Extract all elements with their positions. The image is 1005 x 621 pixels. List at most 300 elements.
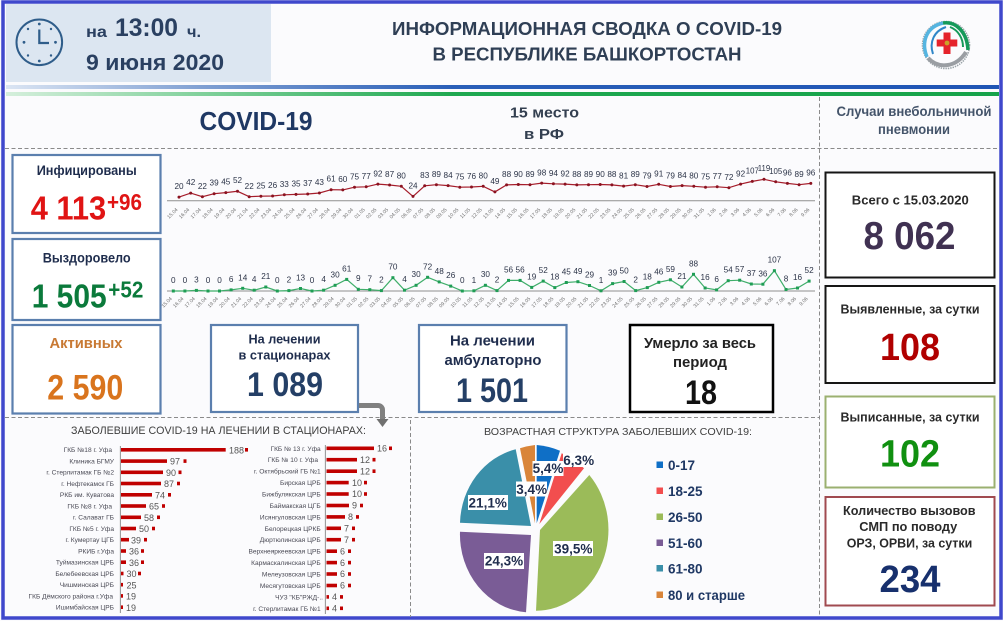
- line chart: infected per day: 61: [327, 174, 336, 184]
- line chart: infected per day: 06.05: [400, 207, 414, 220]
- line chart: infected per day: 89: [584, 170, 593, 179]
- line chart: infected per day: 30.05: [681, 207, 694, 220]
- line chart: infected per day: 4.06: [742, 207, 753, 218]
- line chart: recovered per day: 52: [539, 266, 548, 275]
- line chart: recovered per day: 61: [342, 264, 352, 274]
- bar chart: hospitals right column: 10: [352, 478, 362, 488]
- line chart: recovered per day: 21.04: [230, 296, 243, 309]
- line chart: infected per day: 30.04: [342, 207, 355, 220]
- line chart: infected per day: 22.05: [588, 207, 601, 220]
- line chart: recovered per day: 18.05: [542, 296, 555, 309]
- bar chart: hospitals right column: 16: [377, 444, 387, 454]
- line chart: infected per day: 20.04: [225, 207, 238, 220]
- line chart: infected per day: 11.05: [459, 207, 472, 220]
- line chart: infected per day: 16.05: [517, 207, 531, 220]
- legend: age groups: 61-80: [668, 562, 703, 577]
- line chart: recovered per day: 50: [620, 266, 629, 276]
- line chart: recovered per day: 11.05: [461, 296, 474, 309]
- heading: rank in Russia: [510, 104, 579, 143]
- time: 13:00: [115, 14, 178, 42]
- bar chart: hospitals left column: 30: [126, 569, 137, 579]
- bar chart: hospitals right column: Бижбулякская ЦРБ: [262, 490, 321, 498]
- line chart: infected per day: 77: [362, 172, 371, 181]
- line chart: recovered per day: 0: [217, 276, 222, 285]
- line chart: infected per day: 21.04: [237, 207, 250, 220]
- line chart: infected per day: 27.04: [307, 207, 320, 220]
- bar chart: hospitals right column: 6: [340, 558, 345, 568]
- bar chart: hospitals left column: 90: [166, 468, 176, 478]
- line chart: recovered per day: 29.05: [669, 296, 682, 309]
- bar chart: hospitals left column: 74: [155, 490, 165, 500]
- line chart: infected per day: 03.05: [377, 207, 390, 220]
- time: [86, 14, 201, 42]
- panel: ambulance calls: Количество вызовов: [843, 503, 976, 518]
- line chart: infected per day: 15.05: [506, 207, 519, 220]
- bar chart: hospitals left column: [29, 446, 248, 613]
- line chart: recovered per day: 4.06: [741, 296, 752, 307]
- line chart: infected per day: 83: [420, 171, 430, 180]
- line chart: infected per day: [166, 164, 816, 220]
- line chart: recovered per day: 8: [784, 274, 789, 284]
- line chart: recovered per day: 08.05: [427, 296, 440, 309]
- line chart: infected per day: 15.04: [166, 207, 180, 220]
- line chart: recovered per day: 46: [654, 268, 664, 276]
- pie chart: age structure: 3,4%: [516, 482, 547, 497]
- heading: rank in Russia: в РФ: [524, 126, 564, 143]
- line chart: recovered per day: 59: [666, 265, 675, 274]
- line chart: recovered per day: 2: [379, 276, 384, 284]
- line chart: infected per day: 23.05: [599, 207, 612, 220]
- line chart: infected per day: 24.04: [272, 207, 285, 220]
- panel: infected: +96: [107, 189, 142, 215]
- line chart: infected per day: 16.04: [178, 207, 191, 220]
- bar chart: hospitals right column: Бирская ЦРБ: [280, 480, 321, 487]
- panel: pneumonia discharged per day: [826, 396, 994, 488]
- header divider lines: [6, 85, 999, 96]
- line chart: recovered per day: 06.05: [403, 296, 417, 309]
- panel: recovered: 1 505: [32, 278, 107, 315]
- line chart: recovered per day: 13: [296, 274, 305, 282]
- bar chart: hospitals right column: 9: [352, 501, 357, 511]
- line chart: infected per day: 76: [467, 172, 476, 181]
- heading: pneumonia: пневмонии: [878, 122, 950, 137]
- line chart: recovered per day: 4: [402, 275, 407, 284]
- line chart: infected per day: 80: [397, 172, 406, 180]
- bar chart: hospitals right column: Исянгуловская ЦРБ: [260, 514, 321, 521]
- line chart: infected per day: 29.05: [669, 207, 683, 220]
- line chart: infected per day: 72: [724, 173, 734, 182]
- line chart: infected per day: 88: [502, 170, 512, 179]
- line chart: infected per day: 79: [666, 172, 675, 180]
- icon: health ministry logo: [922, 22, 970, 68]
- line chart: infected per day: 90: [514, 170, 523, 179]
- line chart: recovered per day: 72: [423, 262, 433, 272]
- line chart: infected per day: 17.05: [529, 207, 542, 220]
- line chart: recovered per day: 107: [768, 256, 782, 264]
- bar chart: hospitals right column: 4: [332, 592, 337, 602]
- panel: in hospitals: в стационарах: [238, 347, 331, 362]
- line chart: recovered per day: 15.05: [507, 296, 521, 309]
- line chart: infected per day: 92: [561, 170, 570, 178]
- panel: pneumonia total: Всего с 15.03.2020: [852, 192, 969, 207]
- bar chart: hospitals right column: Мелеузовская ЦРБ: [262, 572, 321, 578]
- line chart: infected per day: 25.05: [623, 207, 636, 220]
- line chart: recovered per day: 15.04: [161, 296, 174, 309]
- line chart: recovered per day: 30: [331, 270, 340, 280]
- line chart: recovered per day: 88: [689, 260, 698, 268]
- line chart: infected per day: 22.04: [248, 207, 261, 220]
- line chart: recovered per day: 3.06: [729, 296, 740, 307]
- line chart: infected per day: 24.05: [611, 207, 624, 220]
- line chart: infected per day: 43: [315, 178, 324, 187]
- line chart: recovered per day: 36: [758, 270, 768, 278]
- line chart: recovered per day: 1.06: [706, 296, 717, 307]
- panel: deaths: период: [673, 354, 727, 371]
- line chart: recovered per day: 21: [677, 272, 687, 281]
- line chart: recovered per day: 07.05: [415, 296, 428, 309]
- legend: age groups: 26-50: [668, 510, 703, 525]
- line chart: infected per day: 75: [350, 172, 359, 182]
- line chart: recovered per day: 23.04: [253, 296, 266, 309]
- line chart: recovered per day: 9.06: [798, 296, 810, 307]
- bar chart: hospitals left column: 58: [144, 513, 154, 523]
- line chart: recovered per day: 18.04: [195, 296, 209, 309]
- panel: active: Активных: [50, 335, 123, 352]
- line chart: recovered per day: 6: [714, 275, 719, 284]
- panel: pneumonia total: 8 062: [864, 215, 956, 258]
- line chart: infected per day: 52: [233, 176, 242, 185]
- line chart: infected per day: 25.04: [283, 207, 297, 220]
- panel: deaths: [630, 325, 773, 412]
- time: на: [86, 24, 107, 41]
- bar chart: hospitals right column: 6: [340, 569, 345, 579]
- arrow: from hospitals panel to hospital chart: [359, 406, 388, 427]
- line chart: infected per day: 77: [713, 172, 722, 181]
- line chart: recovered per day: 18: [643, 272, 652, 282]
- line chart: recovered per day: 29.04: [322, 296, 336, 309]
- line chart: recovered per day: 1: [599, 276, 604, 285]
- bar chart: hospitals right column: 6: [340, 546, 345, 556]
- line chart: infected per day: 8.06: [788, 207, 800, 218]
- bar chart: hospitals right column: Верхнеяркеевская ЦРБ: [248, 549, 321, 556]
- bar chart: hospitals left column: 97: [170, 457, 180, 467]
- line chart: recovered per day: 0: [275, 276, 280, 285]
- line chart: recovered per day: 30.05: [681, 296, 694, 309]
- panel: pneumonia detected per day: Выявленные, за сутки: [840, 301, 980, 316]
- panel: recovered: +52: [108, 276, 143, 302]
- line chart: recovered per day: 56: [516, 266, 525, 274]
- panel: outpatient: амбулаторно: [444, 352, 542, 369]
- bar chart: hospitals right column: 8: [348, 512, 353, 522]
- bar chart: hospitals left column: 19: [126, 603, 136, 613]
- legend: age groups: 80 и старше: [668, 588, 745, 603]
- line chart: recovered per day: 19.04: [207, 296, 220, 309]
- bar chart: hospitals left column: 188: [229, 446, 244, 456]
- panel: outpatient: [419, 325, 566, 412]
- line chart: infected per day: 6.06: [765, 207, 776, 218]
- bar chart: hospitals left column: 19: [126, 592, 136, 602]
- line chart: recovered per day: 56: [504, 266, 513, 274]
- line chart: infected per day: 39: [210, 178, 219, 188]
- bar chart: hospitals right column: Месягутовская ЦРБ: [260, 583, 321, 590]
- line chart: recovered per day: 52: [805, 266, 814, 275]
- line chart: infected per day: 96: [783, 168, 792, 178]
- date: 9 июня 2020: [86, 50, 224, 75]
- panel: infected: [12, 155, 160, 233]
- panel: infected: Инфицированы: [37, 162, 137, 178]
- bar chart: hospitals left column: 36: [129, 558, 139, 568]
- panel: outpatient: 1 501: [456, 372, 528, 410]
- line chart: recovered per day: 22.05: [588, 296, 602, 309]
- line chart: recovered per day: 23.05: [600, 296, 613, 309]
- line chart: infected per day: 80: [689, 172, 699, 180]
- line chart: recovered per day: 17.04: [184, 296, 197, 309]
- line chart: recovered per day: 5.06: [752, 296, 763, 307]
- pie chart: age structure: [460, 445, 608, 612]
- line chart: infected per day: 94: [549, 169, 558, 178]
- bar chart: hospitals right column: Белорецкая ЦРКБ: [265, 526, 321, 533]
- line chart: recovered per day: 04.05: [380, 296, 393, 309]
- line chart: infected per day: 5.06: [753, 207, 765, 218]
- main title: [392, 19, 782, 64]
- line chart: recovered per day: 45: [562, 268, 571, 276]
- line chart: recovered per day: 70: [388, 262, 398, 272]
- line chart: infected per day: 84: [678, 171, 687, 180]
- line chart: recovered per day: 1: [472, 276, 477, 285]
- line chart: infected per day: 87: [385, 170, 395, 179]
- main title: ИНФОРМАЦИОННАЯ СВОДКА О COVID-19: [392, 19, 782, 39]
- line chart: recovered per day: 0: [310, 276, 315, 285]
- bar chart: hospitals left column: Клиника БГМУ: [69, 458, 115, 465]
- line chart: infected per day: 26.04: [295, 207, 308, 220]
- bar chart: hospitals right column: Баймакская ЦГБ: [270, 502, 321, 510]
- line chart: infected per day: 60: [338, 175, 348, 184]
- line chart: infected per day: 26.05: [634, 207, 648, 220]
- bar chart: hospitals left column: г. Стерлитамак ГБ №2: [46, 470, 114, 477]
- line chart: recovered per day: 26: [446, 271, 456, 280]
- panel: ambulance calls: [826, 497, 994, 606]
- line chart: recovered per day: 03.05: [369, 296, 382, 309]
- panel: recovered: Выздоровело: [43, 250, 131, 266]
- line chart: recovered per day: 31.05: [692, 296, 706, 309]
- line chart: recovered per day: 2: [287, 276, 292, 284]
- bar chart: hospitals right column: Дюртюлинская ЦРБ: [260, 537, 321, 544]
- line chart: recovered per day: 20.04: [218, 296, 232, 309]
- line chart: recovered per day: 8.06: [787, 296, 798, 307]
- line chart: infected per day: 75: [701, 172, 710, 182]
- legend: age groups: 0-17: [668, 458, 695, 473]
- line chart: recovered per day: 17.05: [531, 296, 544, 309]
- line chart: infected per day: 35: [291, 180, 301, 188]
- line chart: infected per day: 92: [736, 170, 746, 178]
- heading: COVID-19: COVID-19: [200, 106, 312, 136]
- date and time panel: [6, 4, 271, 82]
- line chart: infected per day: 28.04: [318, 207, 332, 220]
- line chart: recovered per day: 27.05: [646, 296, 659, 309]
- pie chart: age structure: 39,5%: [554, 541, 592, 556]
- bar chart: hospitals right column: 12: [360, 466, 370, 476]
- line chart: recovered per day: 25.05: [623, 296, 636, 309]
- line chart: recovered per day: 16.05: [519, 296, 532, 309]
- line chart: infected per day: 27.05: [646, 207, 659, 220]
- line chart: recovered per day: 37: [747, 269, 756, 278]
- bar chart: hospitals left column: ГКБ №5 г. Уфа: [69, 526, 114, 533]
- line chart: infected per day: 20.05: [564, 207, 577, 220]
- line chart: recovered per day: 09.05: [438, 296, 451, 309]
- line chart: infected per day: 33: [280, 180, 289, 189]
- line chart: recovered per day: 21.05: [577, 296, 590, 309]
- line chart: infected per day: 2.06: [718, 207, 729, 218]
- panel: infected: 4 113: [31, 190, 106, 227]
- bar chart: hospitals left column: ГКБ №8 г. Уфа: [67, 503, 112, 510]
- line chart: recovered per day: 48: [435, 267, 444, 276]
- pie chart: age structure: 5,4%: [533, 461, 563, 476]
- bar chart: hospitals left column: 50: [139, 524, 149, 534]
- heading: age structure: ВОЗРАСТНАЯ СТРУКТУРА ЗАБОЛЕВШИХ COVID-19:: [484, 426, 752, 438]
- line chart: infected per day: 09.05: [435, 207, 449, 220]
- line chart: infected per day: 02.05: [365, 207, 378, 220]
- line chart: infected per day: 13.05: [482, 207, 495, 220]
- bar chart: hospitals left column: Ишимбайская ЦРБ: [56, 604, 114, 612]
- line chart: recovered per day: 20.05: [565, 296, 578, 309]
- line chart: infected per day: 19.04: [213, 207, 226, 220]
- panel: pneumonia discharged per day: Выписанные, за сутки: [840, 410, 980, 425]
- line chart: infected per day: 79: [642, 172, 652, 180]
- line chart: infected per day: 10.05: [447, 207, 460, 220]
- line chart: infected per day: 01.05: [354, 207, 367, 220]
- legend: age groups: [656, 458, 745, 603]
- line chart: recovered per day: 30: [481, 270, 490, 279]
- line chart: infected per day: 107: [746, 166, 759, 176]
- panel: outpatient: На лечении: [450, 332, 535, 350]
- line chart: recovered per day: 4: [321, 275, 326, 284]
- line chart: infected per day: 07.05: [412, 207, 425, 220]
- heading: pneumonia: Случаи внебольничной: [836, 104, 992, 119]
- line chart: infected per day: 89: [525, 170, 535, 179]
- legend: age groups: 51-60: [668, 536, 703, 551]
- bar chart: hospitals left column: РКИБ г.Уфа: [78, 548, 114, 555]
- panel: active: [12, 325, 160, 414]
- line chart: recovered per day: 22.04: [242, 296, 255, 309]
- line chart: recovered per day: 14.05: [496, 296, 509, 309]
- line chart: recovered per day: 0: [171, 276, 176, 285]
- line chart: recovered per day: 30: [412, 270, 421, 279]
- line chart: recovered per day: 01.05: [346, 296, 359, 309]
- line chart: infected per day: 29.04: [330, 207, 343, 220]
- bar chart: hospitals left column: ГКБ Дёмского района г.Уфа: [29, 592, 113, 600]
- line chart: recovered per day: 29: [585, 270, 594, 280]
- panel: deaths: Умерло за весь: [644, 335, 756, 352]
- line chart: recovered per day: 2: [495, 276, 500, 284]
- line chart: recovered per day: 18: [550, 272, 560, 282]
- line chart: infected per day: 22: [245, 182, 254, 191]
- line chart: recovered per day: 4: [252, 275, 257, 284]
- line chart: infected per day: 75: [455, 172, 465, 182]
- pie chart: age structure: 6,3%: [563, 453, 594, 468]
- line chart: recovered per day: 2.06: [717, 296, 729, 307]
- line chart: infected per day: 31.05: [693, 207, 706, 220]
- line chart: infected per day: 7.06: [777, 207, 788, 218]
- line chart: recovered per day: 16: [793, 273, 802, 282]
- line chart: infected per day: 21.05: [576, 207, 589, 220]
- bar chart: hospitals left column: г. Нефтекамск ГБ: [61, 481, 114, 488]
- bar chart: hospitals left column: Туймазинская ЦРБ: [56, 559, 114, 567]
- line chart: infected per day: 96: [806, 168, 816, 178]
- panel: pneumonia discharged per day: 102: [880, 434, 940, 476]
- line chart: recovered per day: [161, 256, 815, 309]
- bar chart: hospitals right column: г. Октябрьский ГБ №1: [254, 468, 321, 476]
- line chart: recovered per day: 14: [238, 274, 248, 282]
- bar chart: hospitals right column: 6: [340, 581, 345, 591]
- line chart: infected per day: 28.05: [658, 207, 671, 220]
- line chart: recovered per day: 16.04: [172, 296, 185, 309]
- panel: ambulance calls: СМП по поводу: [859, 519, 958, 534]
- bar chart: hospitals left column: РКБ им. Куватова: [60, 492, 114, 499]
- line chart: infected per day: 42: [186, 178, 196, 187]
- line chart: recovered per day: 49: [573, 267, 583, 276]
- line chart: recovered per day: 28.05: [658, 296, 671, 309]
- bar chart: hospitals left column: г. Салават ГБ: [73, 515, 114, 522]
- heading: pneumonia: [836, 104, 992, 137]
- line chart: infected per day: 14.05: [494, 207, 507, 220]
- pie chart: age structure: 21,1%: [469, 495, 507, 510]
- line chart: infected per day: 89: [432, 170, 441, 179]
- line chart: recovered per day: 05.05: [392, 296, 405, 309]
- line chart: infected per day: 17.04: [190, 207, 203, 220]
- line chart: recovered per day: 13.05: [484, 296, 498, 309]
- panel: in hospitals: 1 089: [247, 366, 323, 404]
- line chart: recovered per day: 0: [183, 276, 188, 285]
- bar chart: hospitals left column: ГКБ №18 г. Уфа: [64, 447, 112, 454]
- bar chart: hospitals left column: 65: [149, 502, 159, 512]
- line chart: recovered per day: 39: [608, 268, 618, 278]
- panel: pneumonia total: [826, 172, 994, 278]
- line chart: infected per day: 12.05: [471, 207, 484, 220]
- line chart: recovered per day: 28.04: [311, 296, 324, 309]
- line chart: recovered per day: 54: [724, 266, 733, 274]
- line chart: infected per day: 25: [256, 182, 266, 190]
- bar chart: hospitals right column: 7: [344, 535, 349, 545]
- line chart: infected per day: 04.05: [389, 207, 402, 220]
- line chart: infected per day: 23.04: [260, 207, 273, 220]
- line chart: infected per day: 89: [631, 170, 640, 179]
- line chart: recovered per day: 24.05: [611, 296, 625, 309]
- line chart: recovered per day: 6.06: [764, 296, 775, 307]
- line chart: recovered per day: 27.04: [299, 296, 313, 309]
- line chart: recovered per day: 3: [194, 276, 199, 284]
- line chart: infected per day: 119: [758, 164, 770, 173]
- panel: ambulance calls: 234: [880, 559, 940, 601]
- line chart: recovered per day: 2: [633, 276, 638, 284]
- line chart: recovered per day: 19: [527, 272, 537, 282]
- panel: pneumonia detected per day: [826, 286, 994, 383]
- line chart: recovered per day: 30.04: [334, 296, 347, 309]
- bar chart: hospitals left column: Белебеевская ЦРБ: [55, 570, 114, 578]
- line chart: recovered per day: 25.04: [276, 296, 289, 309]
- line chart: recovered per day: 9: [356, 274, 361, 283]
- main title: В РЕСПУБЛИКЕ БАШКОРТОСТАН: [432, 44, 742, 64]
- heading: hospital chart: ЗАБОЛЕВШИЕ COVID-19 НА ЛЕЧЕНИИ В СТАЦИОНАРАХ:: [71, 425, 366, 437]
- line chart: infected per day: 26: [268, 181, 278, 190]
- bar chart: hospitals left column: Чишминская ЦРБ: [60, 582, 114, 589]
- panel: pneumonia detected per day: 108: [880, 327, 940, 369]
- panel: in hospitals: [211, 325, 358, 412]
- panel: active: 2 590: [47, 368, 123, 407]
- panel: deaths: 18: [685, 374, 717, 412]
- time: ч.: [187, 24, 201, 41]
- line chart: infected per day: 105: [769, 167, 783, 176]
- line chart: infected per day: 88: [607, 170, 617, 179]
